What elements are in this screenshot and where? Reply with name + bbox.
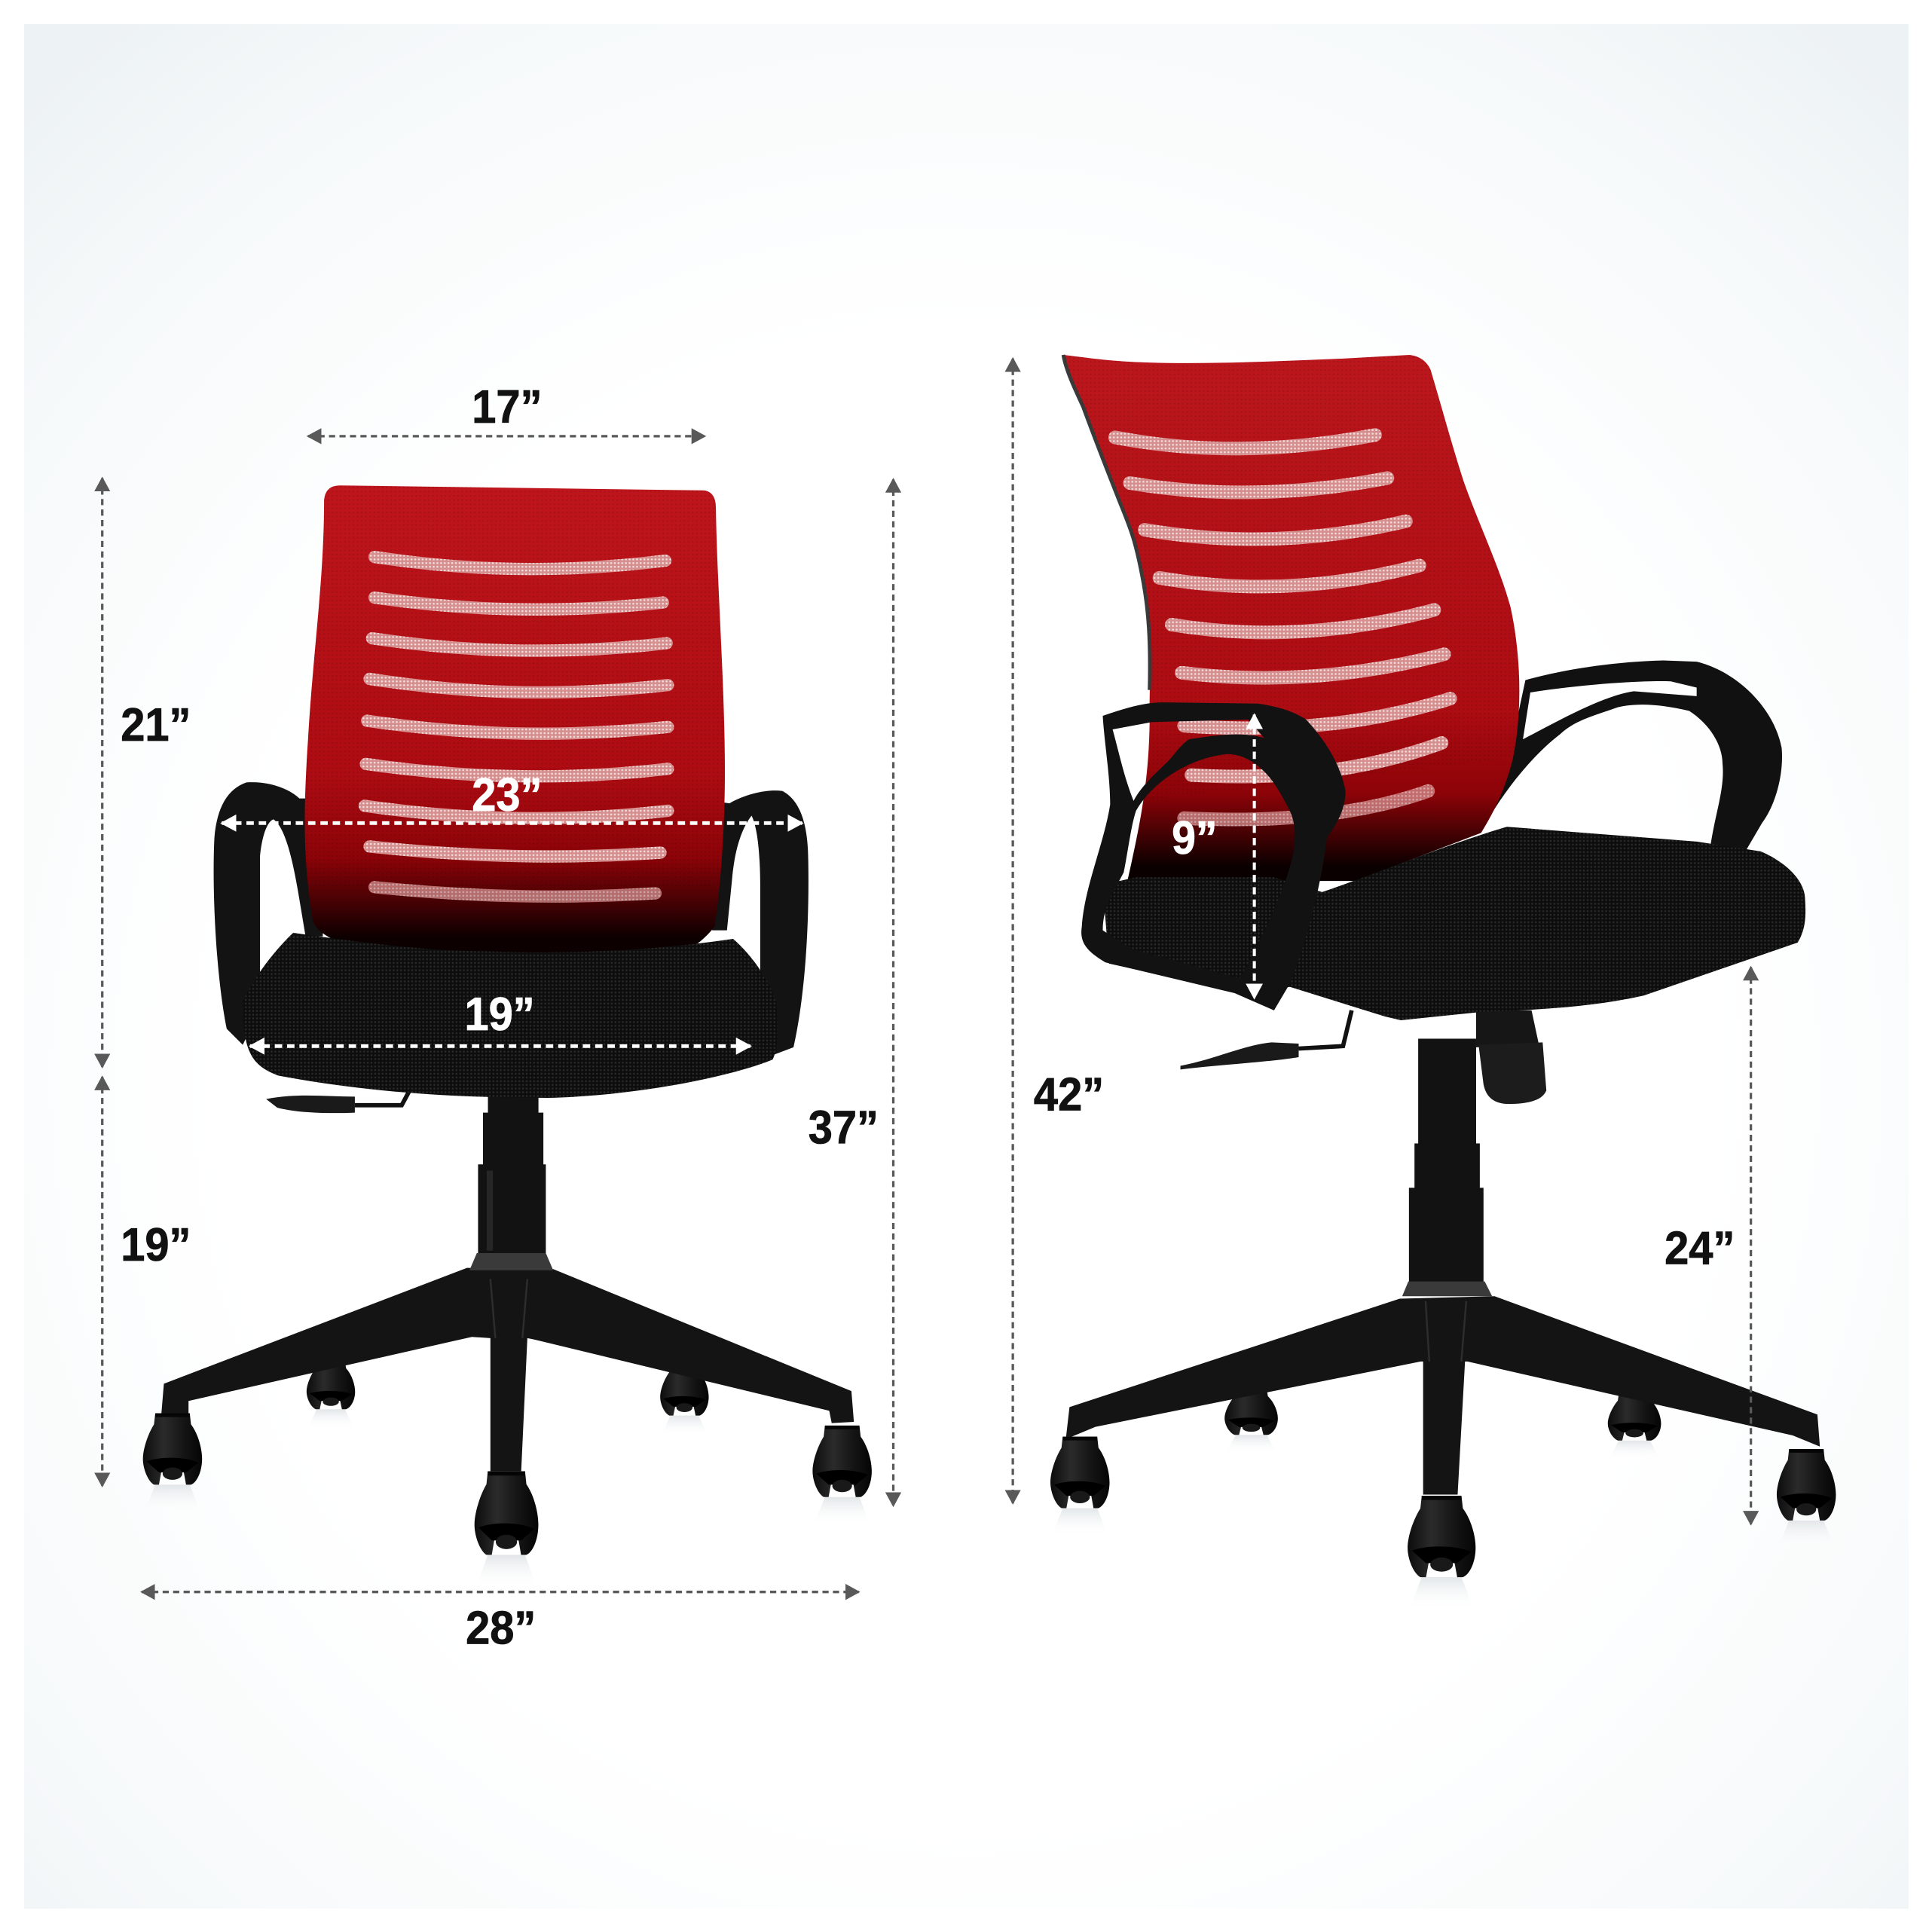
dimension: maximum seat height 24: 24”	[1665, 1223, 1735, 1275]
front chair seat	[243, 933, 778, 1098]
dimension: seat width 19: 19”	[464, 989, 535, 1041]
side chair gas column	[1409, 1038, 1484, 1284]
front chair gas column	[478, 1090, 546, 1255]
front chair front casters	[143, 1414, 872, 1588]
side chair far arm	[1486, 660, 1782, 853]
front chair backrest	[305, 485, 725, 958]
dimension: arm span 23: 23”	[472, 769, 542, 821]
dimension: maximum height 42: 42”	[1034, 1068, 1104, 1120]
front chair backrest slots	[365, 557, 668, 897]
side chair rear casters	[1224, 1389, 1661, 1460]
front chair left arm	[214, 782, 323, 1045]
dimension: backrest width 17: 17”	[472, 381, 542, 433]
side chair height knob	[1476, 1010, 1546, 1104]
dimension: base width 28: 28”	[466, 1602, 536, 1654]
side chair star base	[1065, 1282, 1820, 1495]
dimension: arm height 9: 9”	[1172, 812, 1218, 864]
front chair lever	[266, 1090, 411, 1113]
side chair backrest	[1063, 355, 1519, 881]
side chair front casters	[1050, 1437, 1836, 1609]
side chair backrest slots	[1115, 435, 1451, 820]
front view chair	[143, 485, 872, 1588]
side chair seat	[1103, 827, 1805, 1020]
front chair rear casters	[307, 1361, 709, 1436]
dimension: backrest height 21: 21”	[121, 699, 191, 751]
side view chair	[1050, 355, 1836, 1609]
front chair right arm	[712, 790, 809, 1055]
side chair near arm	[1081, 702, 1346, 1010]
side chair lever	[1181, 1010, 1352, 1069]
dimension: minimum height 37: 37”	[809, 1102, 879, 1154]
dimension: seat height 19: 19”	[121, 1219, 191, 1271]
front chair star base	[161, 1253, 854, 1471]
